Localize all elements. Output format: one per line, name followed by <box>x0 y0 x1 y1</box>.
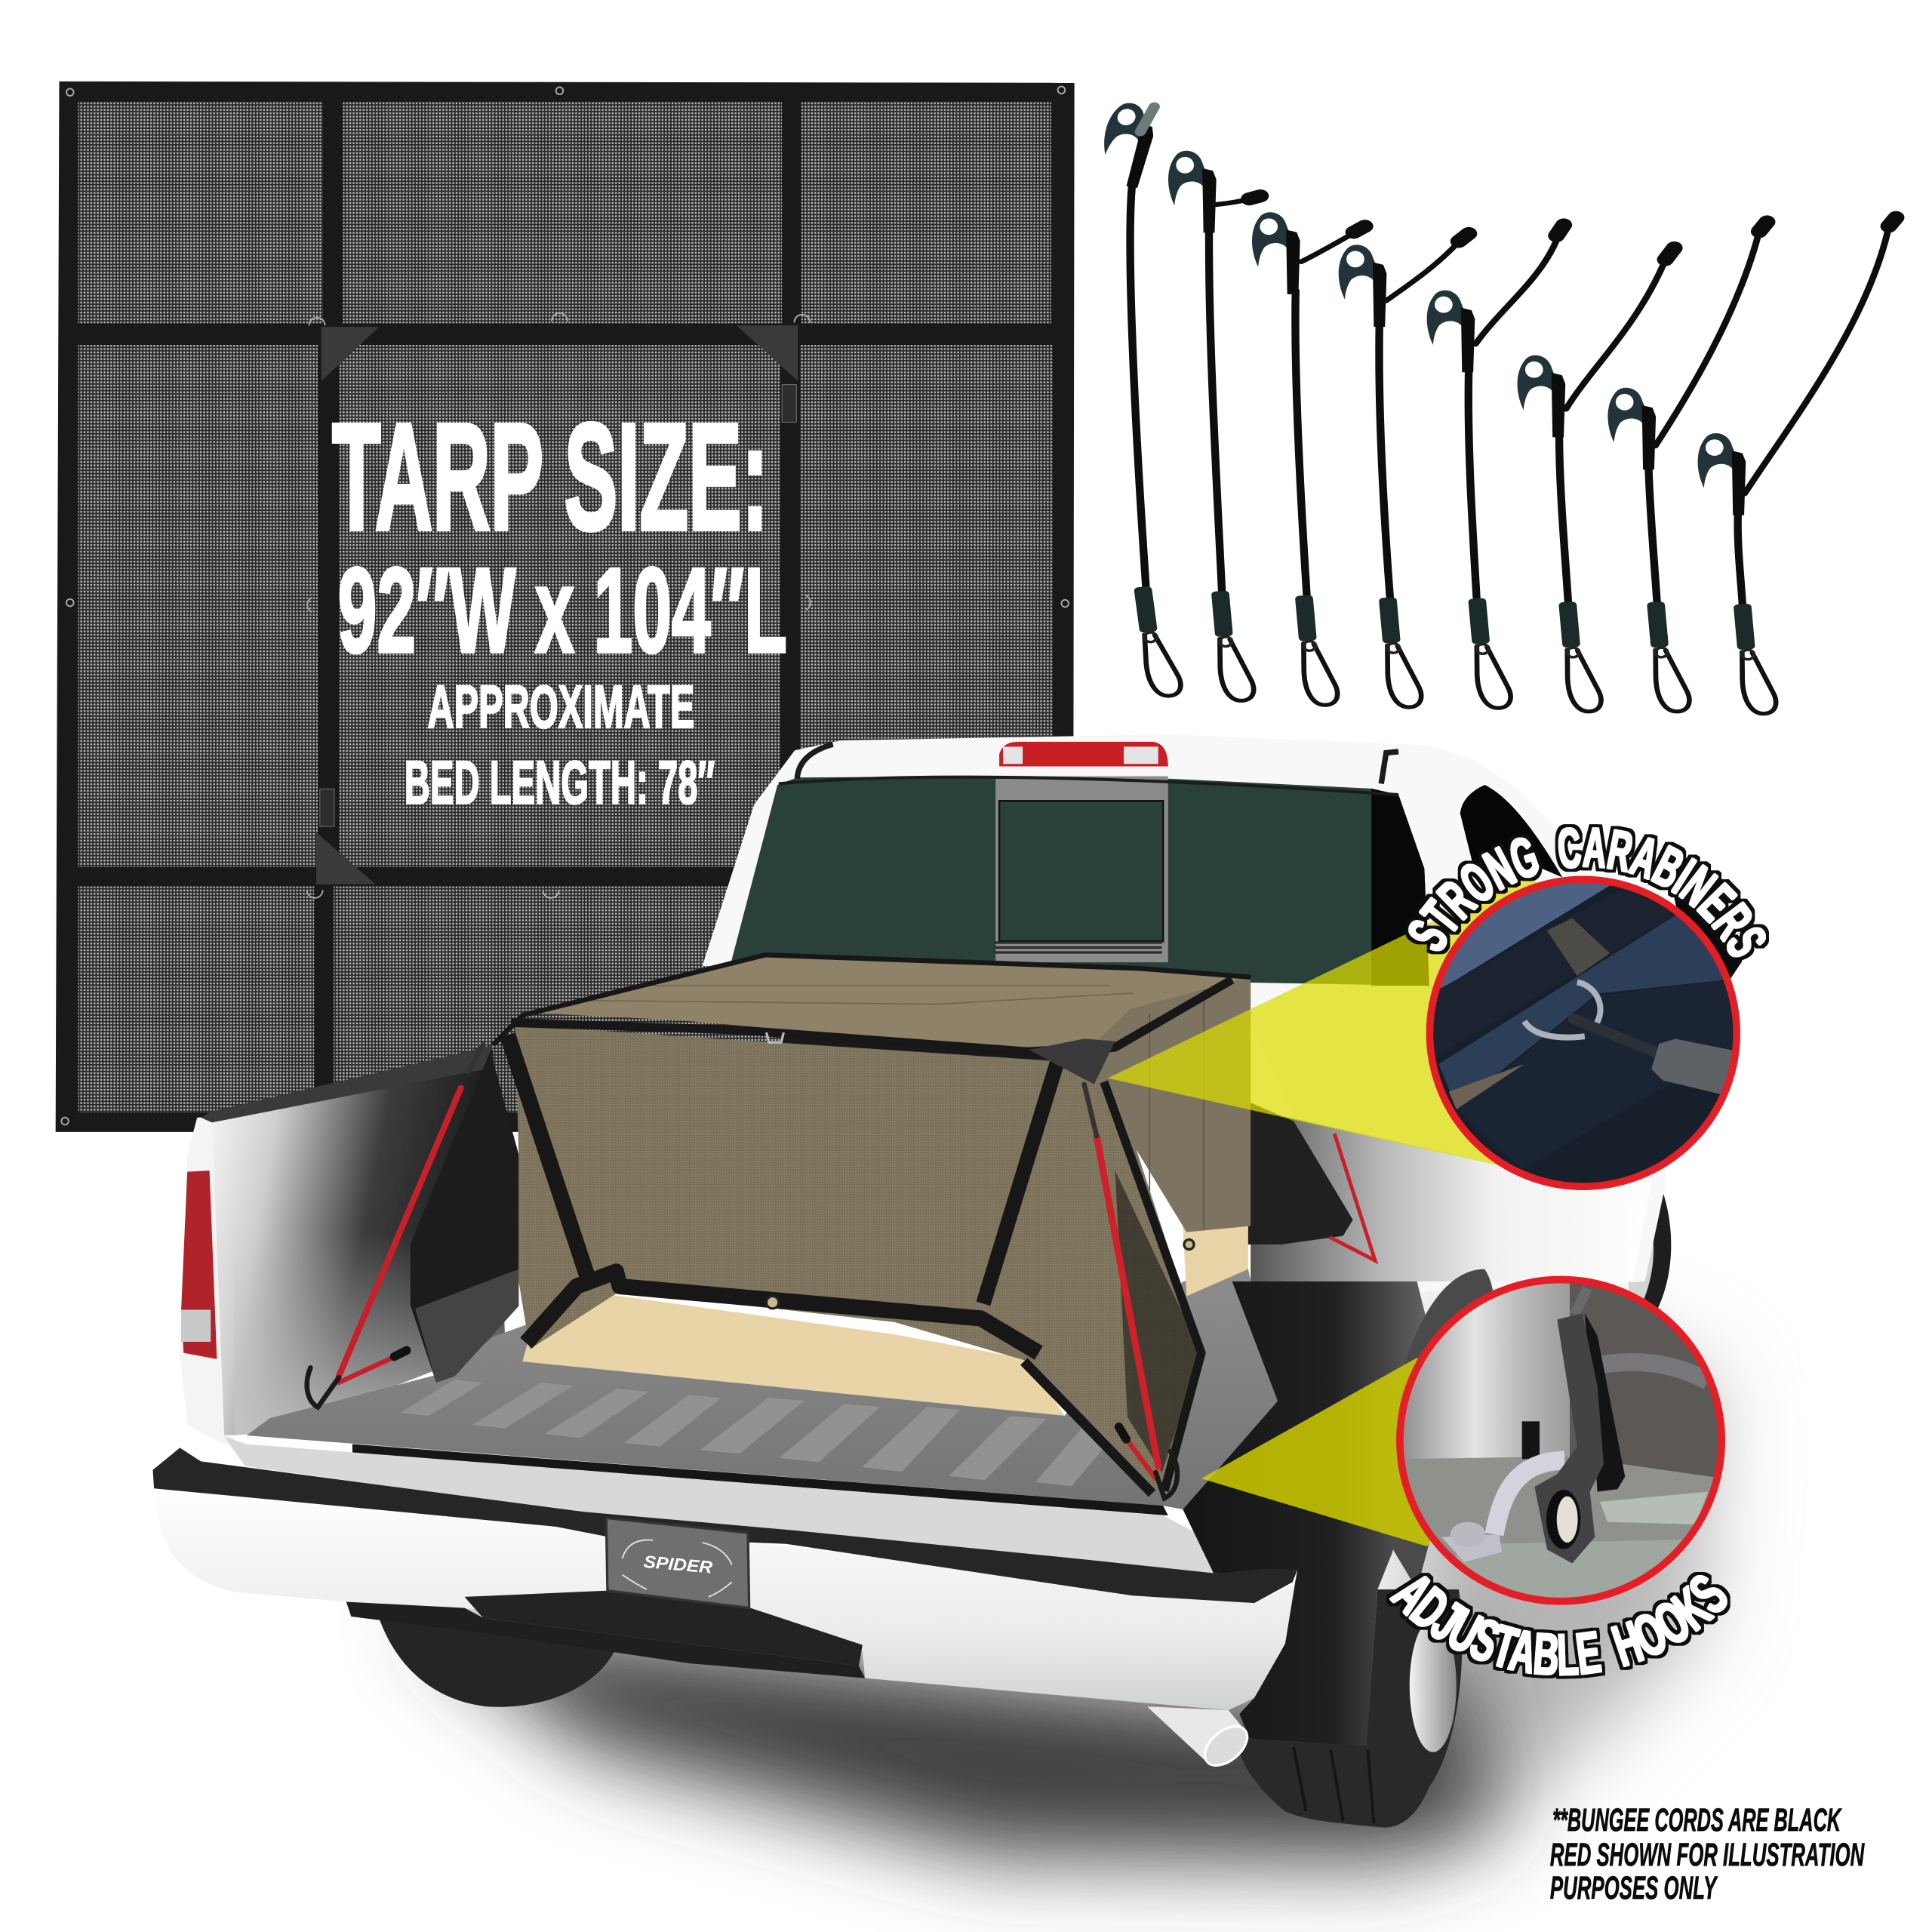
floor shadow <box>413 1281 1712 1860</box>
tail light <box>181 1171 217 1359</box>
sewn labels <box>320 385 796 826</box>
cord 2 <box>1168 151 1260 702</box>
center step <box>465 1591 863 1666</box>
left bungee <box>307 1044 483 1407</box>
bumper under shadow <box>346 1601 865 1678</box>
approximate label: APPROXIMATE <box>427 673 694 740</box>
white hook <box>1494 1460 1564 1534</box>
left black mesh skirt <box>411 1051 518 1383</box>
rear window <box>728 777 1429 986</box>
far bungee <box>1330 1134 1375 1260</box>
front wheel behind body <box>1629 1164 1671 1324</box>
side window <box>1460 785 1562 877</box>
cargo box <box>522 977 1251 1416</box>
dimensions: 92″W x 104″L <box>338 543 787 678</box>
tarp on load <box>493 955 1251 1497</box>
yellow beam: carabiners <box>1108 874 1601 1167</box>
panel: mesh tarp <box>56 82 1075 1132</box>
cord 4 <box>1339 234 1469 709</box>
metal hook body <box>1534 1313 1604 1564</box>
license plate: SPIDER <box>643 1552 714 1577</box>
window louvers <box>995 941 1162 954</box>
right bungee <box>1084 1084 1177 1498</box>
curved label: adjustable hooks: ADJUSTABLE HOOKS <box>1386 1572 1730 1679</box>
floor ribs <box>400 1380 1126 1486</box>
corner patches <box>316 325 798 884</box>
yellow beam: hooks <box>1201 1358 1540 1546</box>
roof pillars <box>797 744 1398 783</box>
cord 3 <box>1252 212 1365 706</box>
bumper white body <box>154 1484 1295 1710</box>
carabiner rod <box>1574 1019 1669 1058</box>
bungee cords set <box>1092 100 1896 715</box>
callout circle: hooks <box>1396 1278 1730 1604</box>
heading: tarp size: TARP SIZE: <box>332 392 768 561</box>
truck <box>152 734 1743 1828</box>
license plate <box>606 1518 749 1608</box>
cord 6 <box>1518 248 1675 712</box>
bed floor <box>247 1269 1278 1509</box>
cord 8 <box>1698 217 1896 715</box>
left bed wall <box>212 1050 505 1435</box>
third brake light <box>999 742 1168 767</box>
rear left tire <box>376 1608 620 1707</box>
strap <box>1440 979 1458 990</box>
grommets and D-rings <box>61 87 1069 1124</box>
wheel rim <box>1410 1619 1457 1752</box>
straps <box>493 955 1251 1494</box>
cord 7 <box>1607 222 1767 712</box>
tan top <box>530 955 1251 1048</box>
bumper black step <box>152 1447 1297 1603</box>
mesh panels <box>78 102 1053 1112</box>
dark gap below floor <box>352 1444 1168 1515</box>
right bed wall mesh <box>1244 1103 1353 1244</box>
left bed rail <box>201 1044 493 1122</box>
sliding window <box>995 777 1168 962</box>
tarp rings <box>767 1032 1194 1309</box>
left body and tail <box>180 1115 234 1444</box>
tan top seams <box>579 986 1134 1004</box>
right black mesh <box>1115 1171 1201 1472</box>
tailgate lip <box>224 1437 1214 1574</box>
clip back <box>1585 1313 1625 1492</box>
footnote: PURPOSES ONLY <box>1550 1870 1718 1906</box>
black tab <box>1522 1421 1540 1459</box>
body side shading <box>1251 1109 1651 1281</box>
rear wheel well <box>1183 1281 1435 1746</box>
front panel <box>515 1025 1201 1497</box>
rear right tire <box>1238 1589 1463 1828</box>
wheel arch <box>1380 1269 1494 1589</box>
callout circle: carabiners <box>1421 875 1749 1192</box>
D-ring <box>1524 982 1601 1038</box>
ferrule <box>1651 1039 1738 1094</box>
screw and washer <box>1441 1534 1502 1562</box>
cord 5 <box>1427 225 1564 709</box>
cab body <box>703 734 1666 1294</box>
side mirror <box>1673 894 1743 980</box>
curved label: strong carabiners: STRONG CARABINERS <box>1405 824 1769 960</box>
cord 1 <box>1092 100 1182 697</box>
bed length: BED LENGTH: 78″ <box>405 749 715 817</box>
exhaust pipe <box>1147 1706 1254 1773</box>
footnote <box>1550 1802 1865 1906</box>
cord <box>1592 1362 1708 1381</box>
corner patch <box>1029 1038 1115 1084</box>
